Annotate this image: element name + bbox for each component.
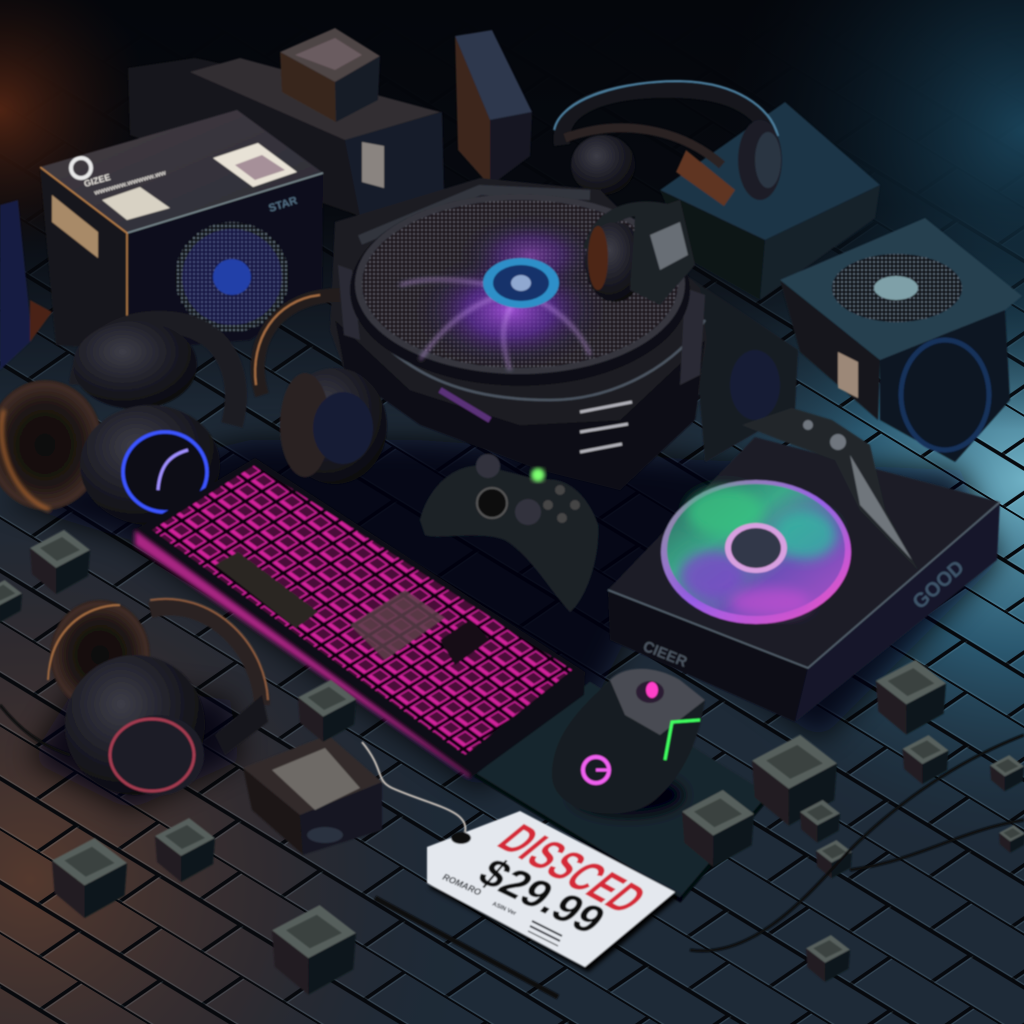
brand badge: STAR: [267, 195, 299, 215]
discount label: DISSCED: [486, 817, 658, 922]
cables: [0, 705, 1024, 951]
keyboard: [135, 458, 585, 778]
barcode: [528, 921, 562, 946]
floor shadows: [0, 440, 1000, 810]
open box with label: [243, 735, 382, 855]
large box with fan: [40, 110, 323, 350]
price tag: [362, 742, 678, 972]
box print: CIEER: [641, 638, 690, 671]
console vents: [440, 390, 632, 452]
back tall box: [455, 30, 532, 186]
headphones on console: [585, 200, 695, 305]
box logo: GIZEE: [83, 172, 112, 189]
pen: [375, 898, 558, 997]
box logo: wwwwww.wwwww.ww: [93, 170, 167, 197]
game controller: [420, 454, 598, 612]
right box with speaker disc: [780, 218, 1022, 462]
back small cube: [280, 28, 380, 122]
price tag: ASIN Ver: [491, 901, 517, 917]
mat under mouse: [475, 682, 770, 900]
fan disc: [350, 194, 690, 386]
small boxes near centre-left: [0, 530, 90, 623]
box behind console right: [690, 278, 798, 462]
headphones: lower left: [48, 599, 268, 795]
rainbow disc: [661, 480, 851, 624]
price: $29.99: [468, 851, 615, 943]
back flat box: [128, 58, 444, 216]
box logo: [71, 158, 167, 197]
central console with fan disc: [330, 178, 707, 490]
headphones: left with blue ring: [0, 321, 236, 525]
headphones: centre left: [255, 295, 387, 484]
fan icon on box: [175, 222, 289, 332]
small print: ROMARO: [441, 872, 483, 898]
scattered money cubes: [52, 660, 1024, 995]
left screen edge: [0, 200, 52, 370]
tag string: [362, 742, 465, 832]
headphones: top right: [554, 81, 782, 206]
knife-shaped accessory: [742, 408, 918, 570]
box with rainbow disc: GOOD: [909, 556, 969, 614]
barcode labels: [102, 143, 297, 220]
box behind top headphones: [660, 102, 880, 300]
gaming mouse: [552, 669, 705, 815]
box with rainbow disc: [608, 437, 1000, 722]
